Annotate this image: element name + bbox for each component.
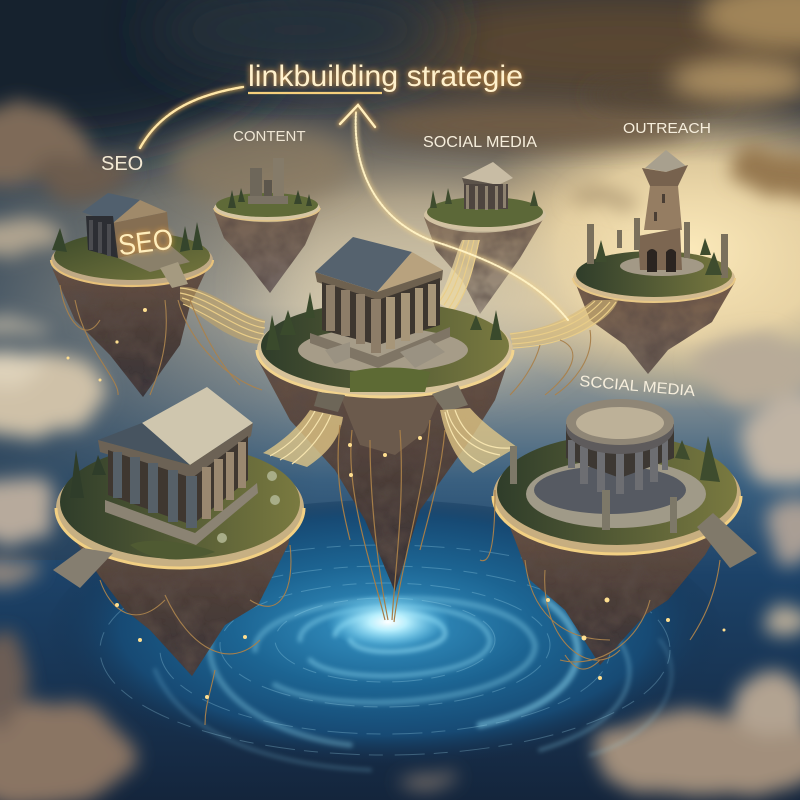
icon: small temple — [430, 162, 538, 210]
label: SEO: SEO — [101, 153, 143, 175]
arrow: rising to title — [340, 105, 568, 320]
stairs — [314, 392, 345, 412]
label: SEO sign: SEO — [117, 224, 175, 262]
label: OUTREACH: OUTREACH — [623, 120, 711, 137]
stairs — [697, 513, 757, 568]
icon: SEO temple — [52, 193, 203, 288]
water vortex — [45, 500, 725, 780]
label: SEO sign: SEO — [117, 224, 175, 262]
island: content — [214, 158, 320, 293]
arrow: SEO to title — [140, 87, 243, 148]
title: linkbuilding strategie — [248, 60, 523, 93]
island: lower left — [53, 387, 304, 676]
island: lower right — [493, 399, 757, 665]
island: SEO — [51, 193, 213, 397]
glowing sparkle arrows — [140, 87, 568, 320]
golden cable bundle: upper links — [178, 240, 618, 395]
island: central temple — [257, 237, 513, 592]
label: SCCIAL MEDIA right: SCCIAL MEDIA — [579, 373, 696, 400]
stairs — [53, 548, 113, 588]
icon: tower — [638, 150, 688, 272]
island: outreach — [573, 150, 735, 374]
icon: content ruins — [228, 158, 312, 208]
golden cable bundle: lower links — [263, 408, 517, 622]
island: social media top — [424, 162, 546, 314]
title: linkbuilding strategie — [248, 60, 523, 93]
icon: round pavilion — [566, 399, 674, 494]
icon: lower-left temple — [98, 387, 258, 545]
label: CONTENT: CONTENT — [233, 128, 306, 145]
icon: central temple — [310, 237, 450, 368]
hanging cords and lights — [60, 285, 726, 725]
label: SOCIAL MEDIA top: SOCIAL MEDIA — [423, 134, 538, 151]
